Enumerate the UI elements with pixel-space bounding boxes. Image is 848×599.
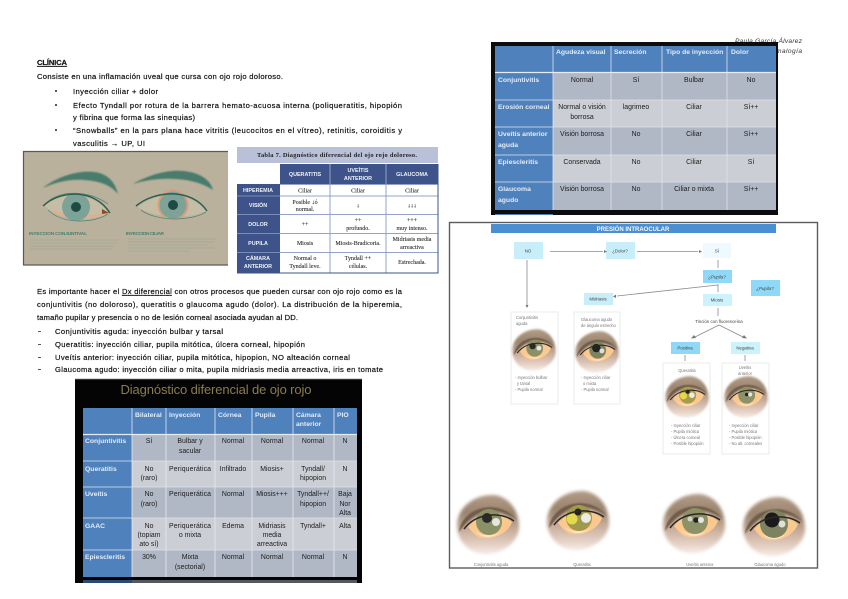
slide table: anterior — [296, 421, 322, 428]
table: agudeza, secreción, inyección, dolor: Sí++ — [744, 131, 758, 138]
table 7: diagnóstico diferencial del ojo rojo doloroso: ↓↓↓ — [408, 204, 416, 210]
flow boxes: ¿Dolor? — [612, 248, 628, 254]
caption: inyección conjuntival — [29, 231, 118, 249]
slide table: Normal — [222, 554, 245, 561]
slide table: Periquerática — [169, 491, 211, 498]
table: agudeza, secreción, inyección, dolor: Sí — [633, 77, 639, 84]
icon: eye conjuntivitis aguda — [457, 495, 519, 567]
slide table: Queratitis — [85, 466, 117, 473]
table: agudeza, secreción, inyección, dolor: Sí — [748, 159, 754, 166]
slide table: Inyección — [169, 412, 200, 419]
table: agudeza, secreción, inyección, dolor: Conservada — [563, 159, 601, 166]
slide table: GAAC — [85, 523, 105, 530]
slide table: media — [263, 532, 282, 539]
table: agudeza, secreción, inyección, dolor: No — [632, 159, 641, 166]
table 7: diagnóstico diferencial del ojo rojo doloroso: células. — [349, 264, 368, 270]
slide table: (sectorial) — [175, 564, 205, 571]
slide table: No — [145, 491, 154, 498]
table 7: diagnóstico diferencial del ojo rojo doloroso: UVEÍTIS — [348, 166, 369, 174]
slide table: o mixta — [179, 532, 201, 539]
card: conjuntivitis aguda: - Inyección bulbar — [515, 375, 548, 380]
table 7: diagnóstico diferencial del ojo rojo doloroso: Estrechada. — [398, 260, 426, 266]
list of differential findings: Uveítis anterior: inyección ciliar, pupila mitótica, hipopion, NO alteación corneal — [55, 353, 350, 362]
slide table: Periquerática — [169, 466, 211, 473]
table 7: diagnóstico diferencial del ojo rojo doloroso: Tyndall ++ — [345, 256, 372, 262]
bullet list: Efecto Tyndall por rotura de la barrera hemato-acuosa interna (poliqueratitis, hipopión — [73, 101, 402, 110]
icon: eye uveítis anterior: Uveítis anterior — [686, 562, 714, 567]
slide table: hipopion — [300, 501, 326, 508]
card: uveítis anterior: anterior — [738, 371, 753, 376]
flow boxes: ¿Pupila? — [708, 274, 726, 280]
table: agudeza, secreción, inyección, dolor: Normal — [571, 77, 594, 84]
list of differential findings: Conjuntivitis aguda: inyección bulbar y tarsal — [55, 327, 223, 336]
table: agudeza, secreción, inyección, dolor: Bulbar — [684, 77, 705, 84]
table 7: diagnóstico diferencial del ojo rojo doloroso: Midriasis media — [393, 237, 432, 243]
table: agudeza, secreción, inyección, dolor: Ciliar — [686, 104, 703, 111]
slide table: Córnea — [218, 412, 242, 419]
panel heading — [491, 224, 776, 233]
slide table: Miosis+++ — [256, 491, 288, 498]
table: agudeza, secreción, inyección, dolor: Agudeza visual — [556, 49, 606, 56]
table: agudeza, secreción, inyección, dolor: Sí++ — [744, 104, 758, 111]
table: agudeza, secreción, inyección, dolor: Ciliar — [686, 159, 703, 166]
panel heading: PRESIÓN INTRAOCULAR — [597, 225, 670, 233]
slide table: Conjuntivitis — [85, 438, 126, 445]
text block: diagnóstico diferencial — [37, 287, 403, 374]
table 7: diagnóstico diferencial del ojo rojo doloroso — [237, 147, 438, 273]
table: agudeza, secreción, inyección, dolor: No — [632, 186, 641, 193]
flow boxes: SÍ — [715, 248, 720, 254]
table: agudeza, secreción, inyección, dolor: aguda — [498, 142, 518, 149]
icon: eye uveítis anterior — [663, 494, 725, 567]
paragraph: tamaño pupilar y presencia o no de lesión corneal asociada ayudan al DD. — [37, 313, 298, 322]
slide table: N — [343, 554, 348, 561]
table 7: diagnóstico diferencial del ojo rojo doloroso: Posible ↓ó — [292, 200, 318, 206]
table 7: diagnóstico diferencial del ojo rojo doloroso: Ciliar — [298, 188, 312, 194]
slide table: Baja — [338, 491, 352, 498]
bullet list: y fibrina que forma las sinequias) — [73, 113, 195, 122]
table title band: Tabla 7. Diagnóstico diferencial del ojo rojo doloroso. — [257, 152, 417, 159]
icon: eye glaucoma agudo — [743, 497, 805, 567]
slide table: Normal — [222, 438, 245, 445]
slide table: Sí — [146, 438, 152, 445]
table: agudeza, secreción, inyección, dolor: Tipo de inyección — [666, 49, 723, 56]
bullet list: vasculitis → UP, UI — [73, 139, 145, 148]
icon: left eye — [43, 172, 118, 221]
table 7: diagnóstico diferencial del ojo rojo doloroso: GLAUCOMA — [396, 172, 428, 178]
table: agudeza, secreción, inyección, dolor: No — [747, 77, 756, 84]
table: agudeza, secreción, inyección, dolor: borrosa — [570, 114, 594, 121]
slide table: 30% — [142, 554, 156, 561]
table 7: diagnóstico diferencial del ojo rojo doloroso: ANTERIOR — [244, 264, 272, 270]
slide table: arreactiva — [257, 541, 287, 548]
card: glaucoma agudo: Glaucoma agudo — [581, 317, 613, 322]
card: uveítis anterior — [722, 363, 769, 454]
slide table: Infiltrado — [220, 466, 246, 473]
table 7: diagnóstico diferencial del ojo rojo doloroso: arreactiva — [400, 245, 424, 251]
table: agudeza, secreción, inyección, dolor: Conjuntivitis — [498, 77, 539, 84]
slide table: Cámara — [296, 412, 321, 419]
table: agudeza, secreción, inyección, dolor: agudo — [498, 197, 518, 204]
table title band — [237, 147, 438, 163]
icon: eye conjuntivitis aguda: Conjuntivitis aguda — [474, 562, 509, 567]
table: agudeza, secreción, inyección, dolor: Ciliar o mixta — [674, 186, 714, 193]
card: uveítis anterior: - Posible hipopión — [729, 435, 762, 440]
table 7: diagnóstico diferencial del ojo rojo doloroso: ANTERIOR — [344, 176, 372, 182]
flow boxes: ¿Pupila? — [756, 286, 774, 291]
slide table: Periquerática — [169, 523, 211, 530]
heading: clínica: CLÍNICA — [37, 58, 68, 67]
table 7: diagnóstico diferencial del ojo rojo doloroso: Miosis-Bradicoria. — [335, 241, 381, 247]
bullet list: “Snowballs” en la pars plana hace vitritis (leucocitos en el vítreo), retinitis, coroiditis y — [73, 126, 402, 135]
slide table: Edema — [222, 523, 244, 530]
card: glaucoma agudo: o mixta — [583, 381, 597, 386]
table 7: diagnóstico diferencial del ojo rojo doloroso: CÁMARA — [246, 255, 270, 262]
table: agudeza, secreción, inyección, dolor: Ciliar — [686, 131, 703, 138]
table 7: diagnóstico diferencial del ojo rojo doloroso: ++ — [355, 218, 362, 224]
slide table: Normal — [302, 438, 325, 445]
table 7: diagnóstico diferencial del ojo rojo doloroso: muy intenso. — [396, 226, 428, 232]
table: agudeza, secreción, inyección, dolor: Secreción — [614, 49, 646, 56]
slide table: PIO — [337, 412, 349, 419]
slide table: Alta — [339, 510, 351, 517]
slide table — [83, 408, 357, 583]
table 7: diagnóstico diferencial del ojo rojo doloroso: Ciliar — [351, 188, 365, 194]
slide table: Normal — [302, 554, 325, 561]
table: agudeza, secreción, inyección, dolor: Erosión corneal — [498, 104, 549, 111]
illustration: conjunctival vs ciliary injection — [23, 151, 228, 265]
text block: clínica — [37, 58, 402, 148]
slide table: No — [145, 523, 154, 530]
table 7: diagnóstico diferencial del ojo rojo doloroso: PUPILA — [248, 241, 268, 247]
card: uveítis anterior: - Pupila miótica — [729, 429, 758, 434]
card: queratitis: Queratitis — [678, 368, 696, 373]
slide table: (topiam — [138, 532, 161, 539]
table: agudeza, secreción, inyección, dolor: Normal o visión — [558, 104, 606, 111]
card: uveítis anterior: - Inyección ciliar — [729, 423, 759, 428]
bullet list: Inyección ciliar + dolor — [73, 87, 158, 96]
slide title: Diagnóstico diferencial de ojo rojo — [120, 382, 312, 397]
card: queratitis: - Posible hipopión — [671, 441, 704, 446]
list of differential findings: Glaucoma agudo: inyección ciliar o mita, pupila midriasis media arreactiva, iris en tomate — [55, 365, 383, 374]
table: agudeza, secreción, inyección, dolor: lagrimeo — [623, 104, 649, 111]
slide table: Midriasis — [258, 523, 286, 530]
table 7: diagnóstico diferencial del ojo rojo doloroso: ++ — [302, 222, 309, 228]
icon: eye glaucoma agudo: Glaucoma agudo — [754, 562, 786, 567]
caption: inyección ciliar — [126, 231, 216, 251]
slide table: Epiescleritis — [85, 554, 125, 561]
slide table: (raro) — [141, 475, 157, 482]
slide table: Normal — [222, 491, 245, 498]
card: glaucoma agudo — [574, 312, 620, 404]
flow boxes: Positiva — [677, 346, 693, 350]
paragraph: conjuntivitis (no doloroso), queratitis o glaucoma agudo (dolor). La distribución de la hiperemia, — [37, 300, 402, 309]
table 7: diagnóstico diferencial del ojo rojo doloroso: normal. — [296, 207, 315, 213]
table 7: diagnóstico diferencial del ojo rojo doloroso: VISIÓN — [249, 201, 267, 209]
table 7: diagnóstico diferencial del ojo rojo doloroso: +++ — [407, 218, 418, 224]
table 7: diagnóstico diferencial del ojo rojo doloroso: profundo. — [346, 225, 370, 232]
icon: eye queratitis — [547, 491, 609, 567]
table 7: diagnóstico diferencial del ojo rojo doloroso: ↓ — [356, 204, 360, 210]
table 7: diagnóstico diferencial del ojo rojo doloroso: Miosis — [297, 241, 314, 247]
slide table: Alta — [339, 523, 351, 530]
caption: inyección conjuntival: INYECCION CONJUNTIVAL — [29, 231, 87, 237]
card: conjuntivitis aguda: Conjuntivitis — [516, 315, 538, 320]
slide table: Tyndall/ — [301, 466, 325, 473]
card: queratitis: - Pupila miótica — [671, 429, 700, 434]
table 7: diagnóstico diferencial del ojo rojo doloroso: Ciliar — [405, 188, 419, 194]
intro sentence: Consiste en una inflamación uveal que cursa con ojo rojo doloroso. — [37, 72, 283, 81]
slide table: sacular — [179, 448, 202, 455]
slide table: Uveítis — [85, 491, 108, 498]
author header — [735, 36, 803, 55]
slide table: hipopion — [300, 475, 326, 482]
caption: inyección ciliar: INYECCION CILIAR — [126, 231, 165, 237]
card: uveítis anterior: - No alt. corneales — [729, 441, 762, 446]
slide table: No — [145, 466, 154, 473]
slide table: Miosis+ — [260, 466, 284, 473]
flow boxes: NO — [525, 248, 532, 254]
slide table: N — [343, 438, 348, 445]
flow boxes: Midriasis — [589, 296, 607, 302]
slide table: Tyndall++/ — [297, 491, 329, 498]
slide table: Nor — [339, 501, 351, 508]
flow boxes: Tinción con fluoresceína — [695, 319, 743, 324]
author header: Paula García Álvarez — [735, 36, 803, 45]
slide: diagnóstico diferencial de ojo rojo — [75, 379, 362, 583]
card: conjuntivitis aguda — [511, 312, 558, 404]
card: glaucoma agudo: - Pupila normal — [581, 387, 609, 392]
slide table: N — [343, 466, 348, 473]
slide table: Pupila — [255, 412, 276, 419]
paragraph: Es importante hacer el Dx diferencial con otros procesos que pueden cursar con ojo rojo como es la — [37, 287, 403, 296]
slide table: (raro) — [141, 501, 157, 508]
flow boxes: Miosis — [711, 298, 724, 302]
icon: right eye — [133, 171, 213, 220]
table: agudeza, secreción, inyección, dolor — [491, 42, 778, 215]
flow boxes — [514, 242, 780, 354]
table 7: diagnóstico diferencial del ojo rojo doloroso: QUERATITIS — [289, 172, 322, 178]
table: agudeza, secreción, inyección, dolor: Epiescleritis — [498, 159, 538, 166]
card: uveítis anterior: Uveítis — [739, 365, 751, 370]
table: agudeza, secreción, inyección, dolor: No — [632, 131, 641, 138]
icon: eye queratitis: Queratitis — [573, 562, 591, 567]
slide table: Mixta — [182, 554, 198, 561]
slide table: Bilateral — [135, 412, 162, 419]
author header: malogía — [776, 48, 802, 55]
list of differential findings: Queratitis: inyección ciliar, pupila mitótica, úlcera corneal, hipopión — [55, 340, 305, 349]
flow boxes: Negativa — [736, 346, 754, 350]
table 7: diagnóstico diferencial del ojo rojo doloroso: DOLOR — [248, 222, 268, 228]
table 7: diagnóstico diferencial del ojo rojo doloroso: Tyndall leve. — [289, 264, 321, 270]
card: glaucoma agudo: - Inyección ciliar — [581, 375, 611, 380]
paragraph — [37, 287, 403, 322]
table: agudeza, secreción, inyección, dolor: Glaucoma — [498, 186, 531, 193]
table: agudeza, secreción, inyección, dolor: Dolor — [731, 49, 749, 56]
slide table: Bulbar y — [177, 438, 203, 445]
table 7: diagnóstico diferencial del ojo rojo doloroso: Normal o — [294, 256, 316, 262]
card: conjuntivitis aguda: aguda — [516, 321, 528, 326]
table: agudeza, secreción, inyección, dolor: Sí++ — [744, 186, 758, 193]
slide table: Normal — [261, 438, 284, 445]
panel: presión intraocular flowchart — [450, 222, 818, 568]
slide table: Normal — [261, 554, 284, 561]
card: queratitis: - Úlcera corneal — [671, 435, 700, 440]
card: conjuntivitis aguda: y tarsal — [517, 381, 530, 386]
card: glaucoma agudo: de ángulo estrecho — [581, 323, 617, 328]
card: queratitis — [663, 363, 710, 454]
card: conjuntivitis aguda: - Pupila normal — [515, 387, 543, 392]
flow arrows — [526, 250, 747, 361]
table: agudeza, secreción, inyección, dolor: Uveítis anterior — [498, 131, 548, 138]
table 7: diagnóstico diferencial del ojo rojo doloroso: HIPEREMIA — [243, 188, 273, 194]
bullet list — [55, 87, 402, 148]
slide table: ato sí) — [139, 541, 159, 548]
list of differential findings — [38, 327, 383, 374]
card: queratitis: - Inyección ciliar — [671, 423, 701, 428]
table: agudeza, secreción, inyección, dolor: Visión borrosa — [560, 131, 604, 138]
table: agudeza, secreción, inyección, dolor: Visión borrosa — [560, 186, 604, 193]
slide table: Tyndall+ — [300, 523, 326, 530]
